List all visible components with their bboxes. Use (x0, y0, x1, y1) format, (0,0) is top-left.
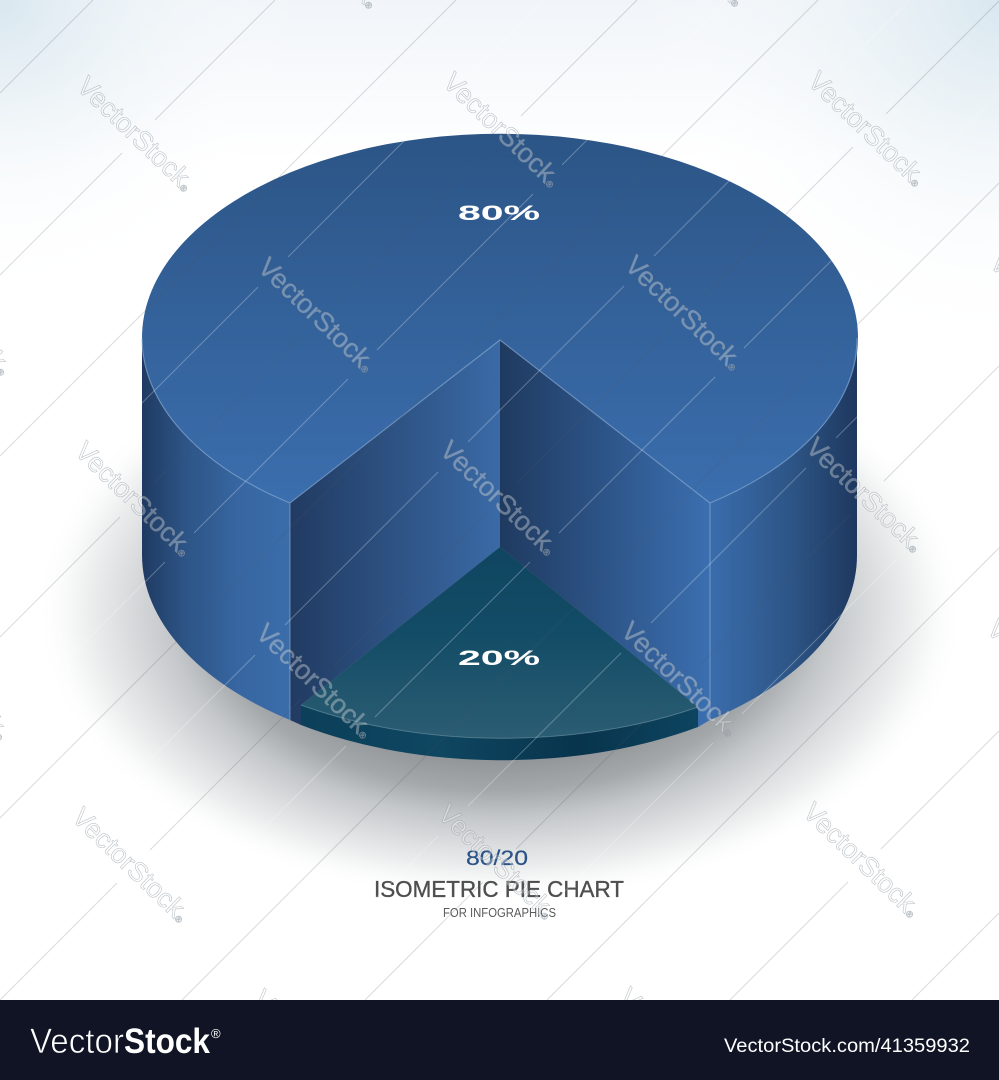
watermark text repeats: VectorStock® (66, 802, 196, 928)
watermark text repeats: VectorStock® (615, 616, 745, 742)
outer side left (142, 338, 290, 720)
subtitle: FOR INFOGRAPHICS (443, 906, 556, 920)
top face edge highlight (142, 338, 857, 720)
title main: ISOMETRIC PIE CHART (374, 876, 624, 902)
footer url: VectorStock.com/41359932 (724, 1035, 970, 1057)
footer band (0, 1000, 999, 1080)
watermark text repeats: VectorStock® (619, 250, 749, 376)
watermark text repeats: Vec (613, 982, 666, 1035)
footer logo: ® (211, 1026, 221, 1041)
watermark text repeats: VectorStock® (434, 435, 564, 561)
watermark text repeats: VectorStock® (437, 67, 567, 193)
20% slice rim (301, 705, 698, 760)
inner wall right (500, 340, 710, 727)
watermark text repeats: VectorStock® (69, 436, 199, 562)
watermark text repeats: Vec (247, 984, 300, 1037)
outer side right (710, 338, 857, 720)
footer logo: Stock (124, 1022, 210, 1061)
watermark text repeats: VectorStock® (802, 66, 932, 192)
footer logo: Vector (30, 1022, 124, 1061)
80% top face (142, 134, 858, 503)
20% slice top (301, 547, 698, 738)
watermark text repeats: VectorStock® (71, 71, 201, 197)
drop shadow (35, 318, 965, 902)
20% slice edge highlight (301, 705, 698, 738)
watermark text repeats: VectorStock® (250, 618, 380, 744)
label: 80%: 80% (458, 202, 541, 225)
watermark text repeats: VectorStock® (252, 252, 382, 378)
watermark text repeats: VectorStock® (800, 432, 930, 558)
watermark text repeats: VectorStock® (432, 799, 562, 925)
label: 20%: 20% (458, 647, 541, 670)
inner wall left (290, 340, 500, 725)
title ratio: 80/20 (466, 847, 528, 870)
isometric pie chart (142, 134, 858, 760)
title block (374, 847, 624, 920)
watermark text repeats: VectorStock® (797, 797, 927, 923)
